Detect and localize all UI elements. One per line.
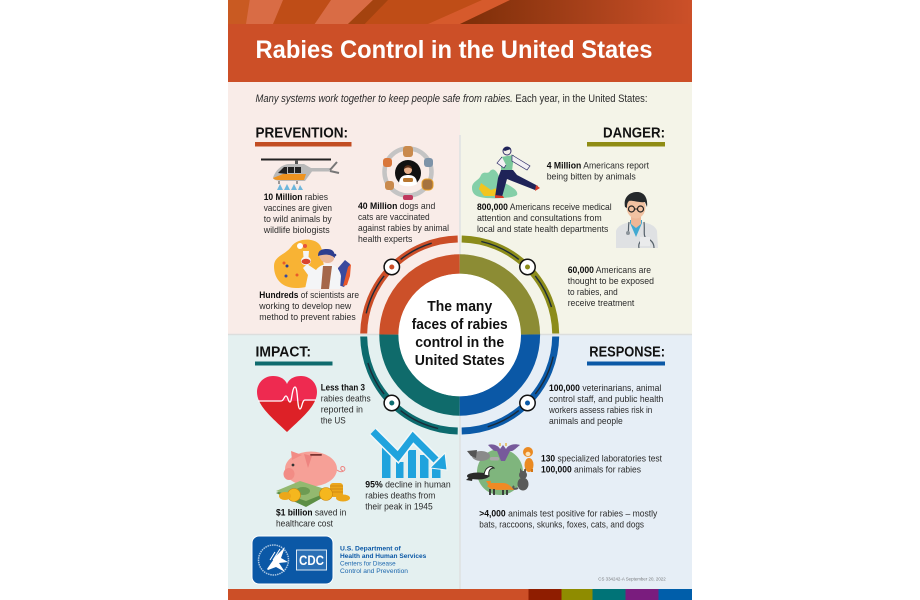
text: 40 million vaccinated: cats are vaccinated (358, 212, 430, 222)
icon: rabies animals (466, 443, 534, 495)
publication code: CS 334242-A September 20, 2022 (598, 576, 666, 582)
icon: doctor (616, 192, 658, 248)
text: 95 percent decline: their peak in 1945 (365, 502, 433, 512)
text: 4 million bitten: being bitten by animals (547, 172, 636, 182)
text: less than 3 deaths: the US (321, 415, 346, 425)
heading: danger (587, 126, 665, 146)
text: 40 million vaccinated: 40 Million dogs and (358, 201, 435, 211)
text: 95 percent decline: 95% decline in human (365, 480, 451, 490)
text: 100,000 workers: animals and people (549, 416, 623, 426)
text: 100,000 workers (548, 383, 663, 426)
text: less than 3 deaths: rabies deaths (321, 393, 371, 403)
text: 4 million bitten (547, 161, 649, 182)
heading: response: RESPONSE: (589, 345, 665, 361)
text: hundreds of scientists: Hundreds of scientists are (259, 290, 359, 300)
text: 95 percent decline (365, 480, 451, 512)
panel: prevention content (255, 126, 449, 322)
text: 60,000 exposed: 60,000 Americans are (568, 265, 651, 275)
text: 95 percent decline: rabies deaths from (365, 491, 436, 501)
text: hundreds of scientists: method to prevent rabies (259, 312, 356, 322)
icon: heart with pulse (257, 376, 317, 432)
logo: CDC (252, 536, 333, 584)
panel: impact content (252, 345, 451, 584)
heading: danger: DANGER: (603, 126, 665, 142)
bottom color band (228, 589, 692, 600)
center label: control in the (415, 335, 504, 351)
text: 800,000 consultations (477, 202, 612, 234)
text: 10 million vaccines: vaccines are given (264, 203, 332, 213)
text: less than 3 deaths: Less than 3 (321, 382, 365, 392)
panel: response content (466, 345, 666, 582)
text: 10 million vaccines: wildlife biologists (263, 225, 330, 235)
heading: impact: IMPACT: (256, 345, 311, 361)
text: agency name: U.S. Department of (340, 546, 401, 552)
text: hundreds of scientists: working to develop new (258, 301, 352, 311)
text: 40 million vaccinated: health experts (358, 234, 413, 244)
text: 1 billion saved: $1 billion saved in (276, 508, 346, 518)
text: hundreds of scientists (258, 290, 359, 322)
logo: CDC: CDC (299, 552, 324, 568)
panel: prevention background (228, 82, 460, 334)
center label (398, 274, 521, 396)
text: less than 3 deaths (321, 382, 371, 425)
text: 10 million vaccines: to wild animals by (264, 214, 332, 224)
panel: impact background (228, 334, 460, 589)
text: 40 million vaccinated: against rabies by animal (358, 223, 449, 233)
text: 800,000 consultations: local and state health departments (477, 224, 609, 234)
node markers (384, 259, 535, 411)
text: 10 million vaccines: 10 Million rabies (264, 192, 328, 202)
thin dark arcs (366, 242, 553, 428)
icon: piggy bank and money (276, 451, 350, 507)
center label: The many (427, 299, 493, 315)
icon: scientist with flask (274, 240, 351, 289)
center label: United States (415, 353, 505, 369)
text: 4,000 positive (479, 509, 658, 530)
text: agency name: Centers for Disease (340, 560, 396, 568)
text: 130 laboratories: 130 specialized laboratories test (541, 454, 662, 464)
heading: response (587, 345, 665, 366)
text: agency name: Control and Prevention (340, 568, 408, 575)
text: agency name: Health and Human Services (340, 553, 427, 560)
text: 60,000 exposed: to rabies, and (568, 287, 618, 297)
text: 100,000 workers: workers assess rabies risk in (548, 405, 652, 415)
intro text: Many systems work together to keep people safe from rabies. Each year, in the United States: (256, 93, 648, 105)
text: 4,000 positive: >4,000 animals test positive for rabies – mostly (479, 509, 658, 519)
text: 10 million vaccines (263, 192, 332, 235)
top decorative band (228, 0, 692, 24)
text: 800,000 consultations: 800,000 Americans receive medical (477, 202, 612, 212)
panel: danger content (472, 126, 665, 308)
icon: veterinarian with pets (383, 146, 433, 200)
heading: prevention: PREVENTION: (256, 126, 348, 142)
icon: helicopter (261, 158, 339, 190)
text: 60,000 exposed: receive treatment (568, 298, 635, 308)
text: 100,000 workers: control staff, and public health (549, 394, 663, 404)
heading: impact (255, 345, 332, 366)
icon: person bitten by dog (472, 147, 540, 198)
text: 130 laboratories: 100,000 animals for rabies (541, 465, 641, 475)
text: 1 billion saved: healthcare cost (276, 519, 333, 529)
text: 60,000 exposed: thought to be exposed (568, 276, 654, 286)
text: 60,000 exposed (568, 265, 654, 308)
inner ring segments (389, 264, 530, 406)
text: less than 3 deaths: reported in (321, 404, 363, 414)
text: agency name (340, 546, 427, 575)
text: 100,000 workers: 100,000 veterinarians, animal (549, 383, 661, 393)
text: 1 billion saved (276, 508, 346, 529)
panel: danger background (460, 82, 692, 334)
central ring diagram (364, 239, 556, 431)
outer ring segments (364, 239, 556, 431)
panel: response background (460, 334, 692, 589)
icon: declining bar chart arrow (373, 432, 447, 478)
text: 4,000 positive: bats, raccoons, skunks, foxes, cats, and dogs (479, 520, 644, 530)
text: 4 million bitten: 4 Million Americans report (547, 161, 649, 171)
text: 800,000 consultations: attention and consultations from (477, 213, 602, 223)
title banner: Rabies Control in the United States (256, 36, 652, 64)
text: 130 laboratories (541, 454, 662, 475)
text: 40 million vaccinated (358, 201, 449, 244)
title banner (228, 24, 692, 82)
center label: faces of rabies (412, 317, 508, 333)
